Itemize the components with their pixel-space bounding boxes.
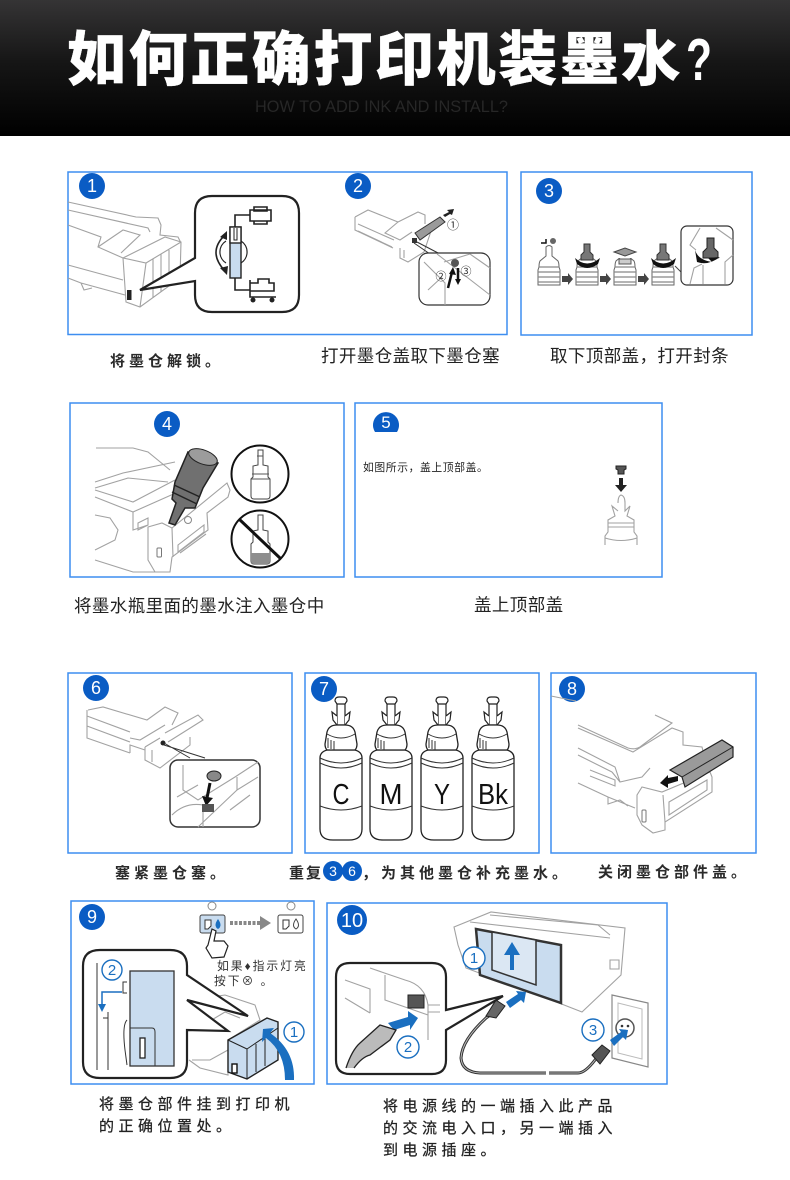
badge 9: 9 [87, 907, 97, 927]
panel: step 10 [327, 903, 667, 1084]
caption 2: 打开墨仓盖取下墨仓塞 [321, 346, 500, 366]
badge 8 [559, 676, 585, 702]
illustration: printer behind unit [189, 995, 260, 1075]
badge 9 [79, 904, 105, 930]
caption 9 [99, 1096, 294, 1135]
callout: inserting the plug [170, 760, 260, 827]
icon: prohibited bottle circle [232, 510, 288, 568]
title: 如何正确打印机装墨水 [67, 27, 683, 93]
caption 9: 的正确位置处。 [99, 1118, 236, 1135]
arrow: plug into socket [610, 1029, 628, 1046]
illustration: ink bottle pouring [169, 445, 219, 525]
callout: removing the tank plug [419, 253, 490, 305]
illustration: printer tank [95, 448, 230, 572]
indicator note [214, 959, 308, 988]
illustration: printer with ink tank [68, 202, 181, 307]
illustration: wall socket [612, 995, 648, 1067]
panel: step 8 [551, 673, 756, 853]
caption 8: 关闭墨仓部件盖。 [598, 863, 750, 881]
marker 1 [284, 1022, 304, 1042]
marker 1: 1 [290, 1024, 298, 1041]
illustration: printer with opened cover: ① [447, 218, 459, 232]
badge 8: 8 [567, 679, 577, 699]
caption 7 with inline step badges: 重复 [289, 864, 323, 882]
callout: hook position: 2 [108, 962, 116, 979]
caption 5: 盖上顶部盖 [474, 595, 564, 615]
illustration: printer with opened cover [355, 209, 459, 262]
illustration: printer back [454, 912, 625, 1012]
panel: step 4 [70, 403, 344, 577]
icon: pressing hand [206, 929, 228, 958]
badge 6 [83, 675, 109, 701]
badge 10 [337, 905, 367, 935]
callout: power inlet: 2 [404, 1039, 412, 1056]
stray printer line near badge [551, 696, 576, 701]
panel: step 9 [71, 901, 314, 1084]
caption 9: 将墨仓部件挂到打印机 [99, 1096, 294, 1113]
caption 7 with inline step badges: ，为其他墨仓补充墨水。 [362, 862, 571, 883]
callout: power inlet [336, 963, 503, 1074]
illustration: ink tank unit [228, 1018, 278, 1079]
text note: 如图所示，盖上顶部盖。 [363, 459, 488, 475]
illustration: power cable [461, 1000, 610, 1078]
illustration: closing the cover [660, 740, 733, 788]
panel: steps 1 and 2 [68, 172, 507, 334]
callout: removing the tank plug: ② [436, 270, 446, 283]
illustration: bottle M [370, 697, 412, 840]
illustration: four bottles [538, 238, 676, 285]
panel: step 3 [521, 172, 752, 335]
illustration: bottle Y: Y [434, 779, 450, 811]
illustration: capping bottle [605, 466, 637, 545]
badge 6: 6 [91, 678, 101, 698]
callout: removing the tank plug: ③ [460, 265, 472, 278]
badge 1 [79, 173, 105, 199]
callout: hook position [83, 950, 248, 1078]
marker 3 [582, 1019, 604, 1041]
indicator note: 按下⊗ 。 [214, 974, 274, 988]
caption 7 with inline step badges: 6 [348, 863, 356, 879]
illustration: bottle Bk: Bk [478, 779, 508, 811]
icon: indicator after [278, 902, 303, 933]
marker 1 [463, 947, 485, 969]
marker 3: 3 [589, 1022, 597, 1039]
header banner [0, 0, 790, 136]
title: ? [686, 27, 712, 93]
caption 1: 将墨仓解锁。 [110, 352, 224, 370]
illustration: bottle Y [421, 697, 463, 840]
caption 4: 将墨水瓶里面的墨水注入墨仓中 [74, 596, 325, 616]
indicator note: 如果♦指示灯亮 [217, 959, 308, 973]
icon: correct bottle circle [232, 446, 288, 502]
caption 10: 将电源线的一端插入此产品 [383, 1098, 617, 1115]
badge 5 [373, 412, 399, 432]
badge 1: 1 [87, 176, 97, 196]
badge 4: 4 [162, 414, 172, 434]
badge 3 [536, 178, 562, 204]
caption 10 [383, 1098, 617, 1159]
arrow: swing up [262, 1028, 294, 1080]
caption 10: 的交流电入口，另一端插入 [383, 1117, 617, 1138]
illustration: printer [87, 707, 205, 768]
badge 5: 5 [381, 413, 391, 432]
panel: step 7 [305, 673, 539, 853]
caption 10: 到电源插座。 [383, 1142, 500, 1159]
icon: indicator before [200, 902, 225, 933]
illustration: printer [578, 715, 712, 833]
badge 2 [345, 173, 371, 199]
illustration: bottle M: M [380, 779, 402, 811]
caption 7 with inline step badges: 3 [329, 863, 337, 879]
inset: opening cap [675, 226, 733, 285]
illustration: bottle C: C [332, 779, 350, 811]
marker 1: 1 [470, 950, 478, 967]
caption 3: 取下顶部盖，打开封条 [550, 343, 729, 368]
illustration: bottle Bk [472, 697, 514, 840]
panel: step 5 [355, 403, 662, 577]
callout: lever positions [140, 196, 299, 312]
badge 2: 2 [353, 176, 363, 196]
panel: step 6 [68, 673, 292, 853]
subtitle: HOW TO ADD INK AND INSTALL? [255, 97, 508, 116]
badge 7: 7 [319, 679, 329, 699]
badge 10: 10 [341, 910, 363, 932]
badge 3: 3 [544, 181, 554, 201]
caption 6: 塞紧墨仓塞。 [115, 864, 229, 882]
badge 7 [311, 676, 337, 702]
arrow: plug into printer [506, 991, 526, 1008]
arrow: dotted progress [230, 916, 271, 930]
badge 4 [154, 411, 180, 437]
illustration: bottle C [320, 697, 362, 840]
